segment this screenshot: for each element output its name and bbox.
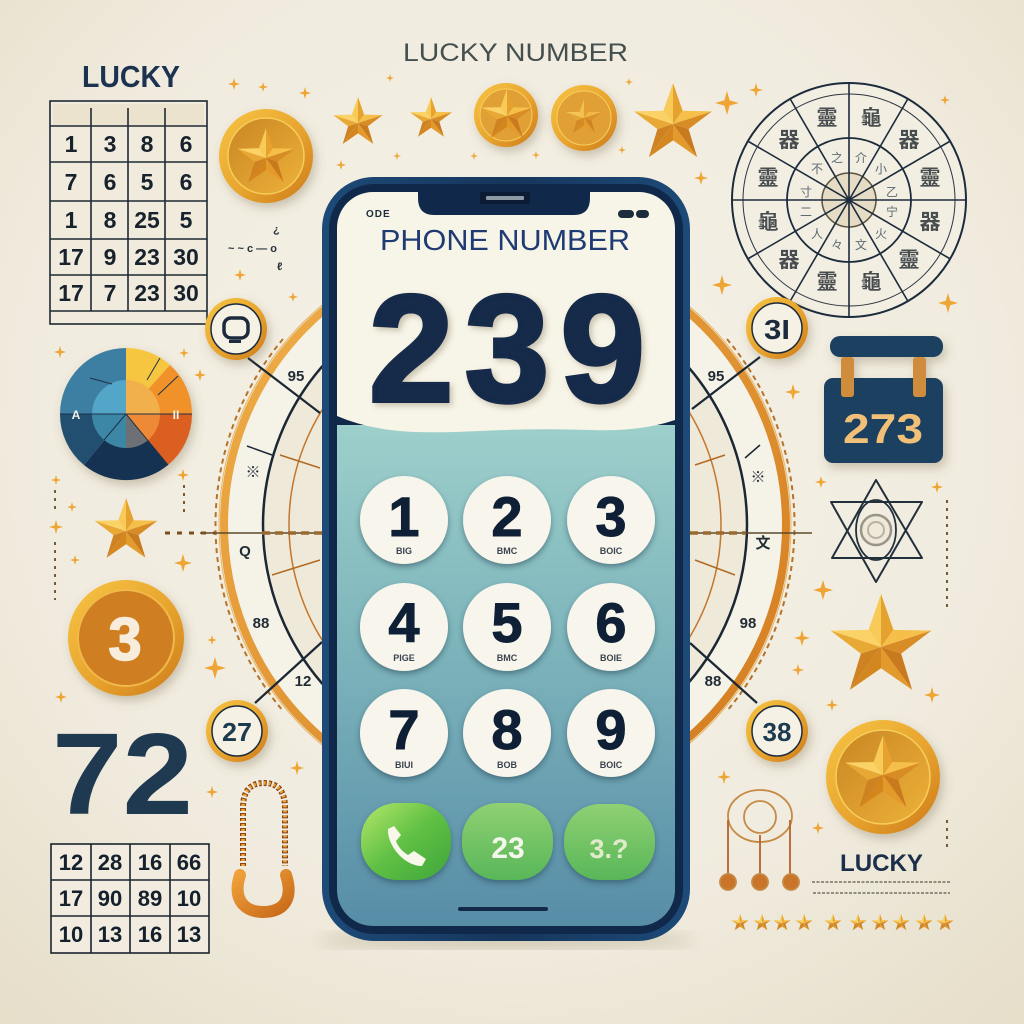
row of small stars: [731, 914, 954, 930]
badge: bottom right: [746, 700, 808, 762]
status bar right: [618, 210, 649, 218]
star: large top right: [634, 83, 712, 157]
green button 3?: [564, 804, 655, 880]
calendar: top left: 5: [180, 207, 193, 233]
keypad sublabels: BIUI: [395, 760, 413, 770]
keypad sublabels: BOIC: [600, 760, 623, 770]
keypad digits: 9: [595, 698, 627, 761]
small dark glyph marks: [228, 224, 282, 273]
astrology ring behind phone: Q: [239, 543, 251, 560]
calendar: top left: 8: [104, 207, 117, 233]
zodiac wheel: 靈: [816, 271, 838, 294]
astrology ring behind phone: 88: [705, 673, 721, 690]
zodiac wheel: 不: [811, 162, 823, 176]
star: left middle: [95, 498, 157, 558]
zodiac wheel: 人: [811, 227, 823, 241]
calendar: top left: [50, 101, 207, 324]
call button: [361, 803, 451, 880]
calendar: bottom left: 66: [177, 850, 201, 875]
calendar: bottom left: 13: [98, 922, 122, 947]
badge: bottom left: 27: [222, 717, 252, 747]
coin: top centre left: [474, 83, 538, 147]
zodiac wheel: 文: [855, 237, 867, 252]
badge: bottom left: [206, 700, 268, 762]
keypad digits: 8: [491, 698, 523, 761]
calendar: bottom left: 10: [177, 886, 201, 911]
calendar: bottom left: 10: [59, 922, 83, 947]
keypad digits: 6: [595, 591, 627, 654]
calendar: bottom left: [51, 844, 209, 953]
zodiac wheel: [732, 83, 966, 317]
astrology ring behind phone: 88: [253, 615, 269, 632]
keypad sublabels: BOIE: [600, 653, 622, 663]
calendar: top left: 17: [58, 244, 84, 270]
zodiac wheel: 器: [898, 129, 920, 152]
keypad digits: [388, 485, 627, 761]
big number 72: 72: [52, 709, 193, 839]
coin: star top left: [219, 109, 313, 203]
keypad digits: 2: [491, 485, 523, 548]
zodiac wheel: 火: [875, 227, 887, 241]
zodiac wheel: 龜: [860, 107, 882, 130]
phone: [322, 177, 690, 941]
calendar: top left: 30: [173, 280, 199, 306]
zodiac wheel: 靈: [898, 249, 920, 272]
badge: top right: [746, 297, 808, 359]
phone screen: [337, 425, 675, 926]
green button 23: 23: [491, 832, 525, 865]
speaker: [480, 192, 530, 204]
astrology ring behind phone: 文: [755, 534, 771, 552]
zodiac wheel: 寸: [800, 185, 812, 199]
calendar: bottom left: 16: [138, 922, 162, 947]
notch: [418, 190, 590, 215]
coin: top centre right: [551, 85, 617, 151]
zodiac wheel: 器: [778, 249, 800, 272]
astrology ring behind phone: ※: [245, 464, 261, 481]
heading: lucky left: LUCKY: [82, 59, 180, 94]
astrology ring behind phone: 98: [740, 615, 756, 632]
calendar: top left: 9: [104, 244, 116, 270]
pie chart: A: [72, 408, 81, 422]
calendar: bottom left: 90: [98, 886, 122, 911]
hanging calendar: [824, 336, 943, 463]
calendar: bottom left: 16: [138, 850, 162, 875]
calendar: top left: 1: [65, 131, 78, 157]
astrology ring behind phone: 95: [708, 368, 724, 385]
zodiac wheel: 介: [855, 151, 867, 165]
zodiac wheel: 宁: [886, 204, 898, 219]
phone shadow: [316, 932, 696, 948]
keypad digits: 7: [388, 698, 420, 761]
small dark glyph marks: ~ ~ c — o: [228, 243, 277, 255]
star: right large: [831, 594, 931, 690]
zodiac wheel: 小: [875, 162, 887, 176]
keypad sublabels: PIGE: [393, 653, 415, 663]
big number: 239: [369, 264, 645, 434]
star: top row second: [410, 97, 452, 137]
calendar: top left: 5: [141, 169, 154, 195]
keypad digits: 4: [388, 591, 420, 654]
heading: phone number: PHONE NUMBER: [380, 225, 630, 257]
keypad: [360, 476, 655, 777]
calendar: bottom left: 13: [177, 922, 201, 947]
zodiac wheel: 器: [920, 211, 940, 234]
zodiac wheel: 器: [778, 129, 800, 152]
calendar: top left: 7: [104, 280, 116, 306]
small caption lines: [812, 882, 950, 893]
brown dashed vertical marks: [55, 485, 947, 850]
atom icon: [831, 480, 922, 582]
astrology ring behind phone: [165, 239, 812, 811]
pie chart: [60, 348, 192, 480]
screen top panel: [337, 192, 675, 432]
heading: lucky right: LUCKY: [840, 850, 923, 877]
calendar: top left: 25: [134, 207, 160, 233]
calendar: top left: 6: [180, 169, 192, 195]
star: top row small: [333, 97, 383, 144]
calendar: top left: 8: [141, 131, 154, 157]
calendar: top left: 23: [134, 280, 160, 306]
keypad digits: 1: [388, 485, 420, 548]
coin: number 3: 3: [108, 606, 142, 673]
calendar: top left: 23: [134, 244, 160, 270]
zodiac wheel: 二: [800, 205, 812, 219]
zodiac wheel: 靈: [758, 167, 778, 190]
keypad digits: 3: [595, 485, 627, 548]
keypad digits: 5: [491, 591, 523, 654]
calendar: top left: 3: [104, 131, 116, 157]
astrology ring behind phone: 12: [295, 673, 311, 690]
coin: star bottom right: [826, 720, 940, 834]
keypad sublabels: BMC: [497, 653, 518, 663]
keypad sublabels: [393, 546, 623, 770]
speaker slit: [486, 196, 524, 200]
badge: top right: 3I: [764, 314, 790, 345]
pendant charm: [720, 790, 799, 890]
calendar: bottom left: 89: [138, 886, 162, 911]
zodiac wheel: 龜: [860, 271, 882, 294]
zodiac wheel: 龜: [758, 211, 778, 234]
astrology ring behind phone: ※: [750, 469, 766, 486]
calendar: top left: 30: [173, 244, 199, 270]
keypad sublabels: BOIC: [600, 546, 623, 556]
zodiac wheel: 々: [831, 238, 843, 252]
keypad sublabels: BIG: [396, 546, 412, 556]
scattered sparkles: [49, 74, 958, 834]
calendar: top left: 17: [58, 280, 84, 306]
pie chart: II: [173, 408, 179, 422]
calendar: top left: 6: [180, 131, 192, 157]
calendar: bottom left: 12: [59, 850, 83, 875]
keypad sublabels: BOB: [497, 760, 518, 770]
green button 3?: 3.?: [589, 834, 629, 864]
coin: number 3: [68, 580, 184, 696]
title: lucky number: LUCKY NUMBER: [403, 39, 628, 67]
small dark glyph marks: ℓ: [277, 261, 282, 273]
calendar: top left: 6: [104, 169, 116, 195]
zodiac wheel: 靈: [920, 167, 940, 190]
calendar: top left: 7: [65, 169, 77, 195]
zodiac wheel: 乙: [886, 185, 898, 199]
hanging calendar: 273: [843, 405, 923, 452]
badge: top left: [205, 298, 267, 360]
safety pin charm: [238, 783, 289, 912]
green button 23: [462, 803, 553, 880]
zodiac wheel: 靈: [816, 107, 838, 130]
home indicator: [458, 907, 548, 911]
calendar: top left: 1: [65, 207, 78, 233]
calendar: bottom left: 28: [98, 850, 122, 875]
astrology ring behind phone: 95: [288, 368, 304, 385]
status bar left: ODE: [366, 209, 391, 220]
calendar: bottom left: 17: [59, 886, 83, 911]
keypad sublabels: BMC: [497, 546, 518, 556]
small dark glyph marks: ¿: [273, 224, 280, 236]
zodiac wheel: 之: [831, 151, 843, 165]
badge: bottom right: 38: [763, 717, 791, 747]
